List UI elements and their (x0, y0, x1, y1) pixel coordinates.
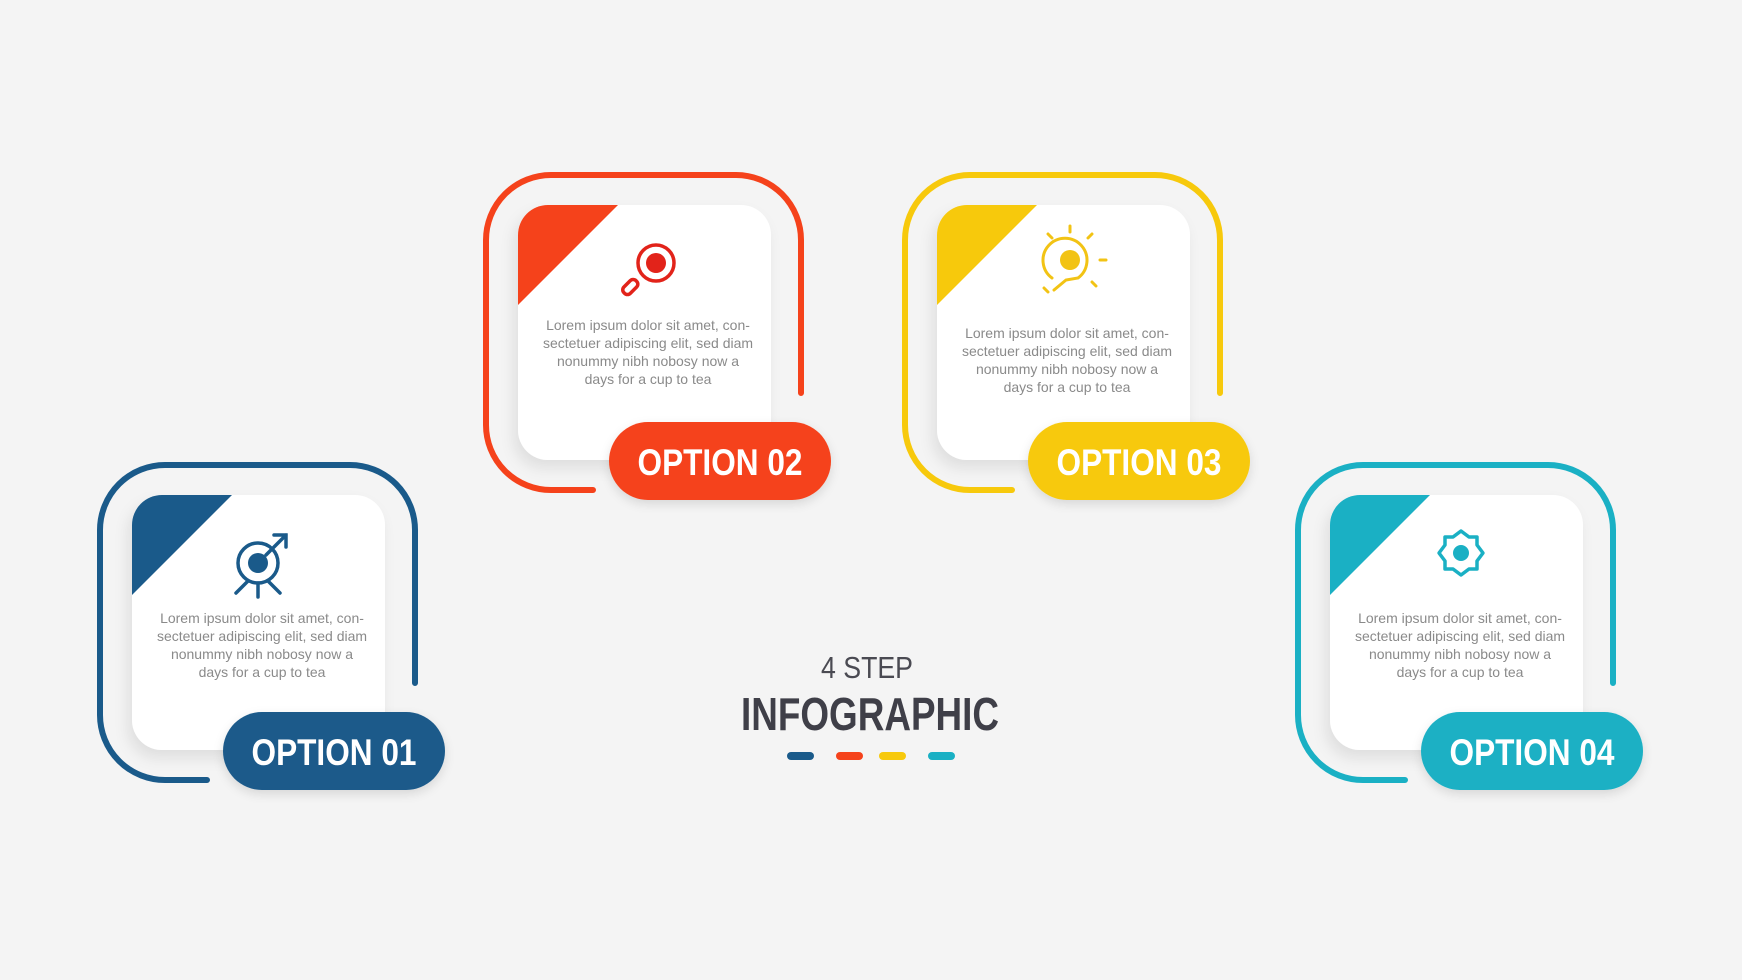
text block: days for a cup to tea (199, 664, 326, 680)
panel: option 03 (905, 175, 1250, 500)
text block: days for a cup to tea (1004, 379, 1131, 395)
inner card (937, 205, 1190, 460)
icon: gear (1439, 531, 1483, 575)
text block: sectetuer adipiscing elit, sed diam (157, 628, 367, 644)
panel: option 02 (486, 175, 831, 500)
title (741, 650, 999, 740)
text block: Lorem ipsum dolor sit amet, con- (1358, 610, 1562, 626)
option pill: OPTION 02 (638, 442, 802, 483)
inner card (1330, 495, 1583, 750)
corner triangle (518, 205, 618, 305)
text block: sectetuer adipiscing elit, sed diam (962, 343, 1172, 359)
text block: days for a cup to tea (1397, 664, 1524, 680)
option pill: OPTION 01 (252, 732, 416, 773)
icon: magnifier (621, 245, 674, 296)
frame outline (486, 175, 801, 490)
text block: sectetuer adipiscing elit, sed diam (543, 335, 753, 351)
option pill: OPTION 03 (1056, 442, 1222, 483)
corner triangle (1330, 495, 1430, 595)
frame outline (1298, 465, 1613, 780)
text block: Lorem ipsum dolor sit amet, con- (160, 610, 364, 626)
corner triangle (132, 495, 232, 595)
frame outline (100, 465, 415, 780)
title: INFOGRAPHIC (741, 688, 999, 740)
text block: nonummy nibh nobosy now a (1369, 646, 1551, 662)
option pill: OPTION 04 (1450, 732, 1615, 773)
frame outline (905, 175, 1220, 490)
text block: nonummy nibh nobosy now a (171, 646, 353, 662)
text block: sectetuer adipiscing elit, sed diam (1355, 628, 1565, 644)
panel: option 01 (100, 465, 445, 790)
panel: option 04 (1298, 465, 1643, 790)
text block: nonummy nibh nobosy now a (976, 361, 1158, 377)
corner triangle (937, 205, 1037, 305)
option pill (1028, 422, 1250, 500)
option pill (609, 422, 831, 500)
inner card (518, 205, 771, 460)
option pill (223, 712, 445, 790)
text block: Lorem ipsum dolor sit amet, con- (546, 317, 750, 333)
option pill (1421, 712, 1643, 790)
text block: nonummy nibh nobosy now a (557, 353, 739, 369)
text block: days for a cup to tea (585, 371, 712, 387)
icon: light bulb (1043, 226, 1106, 292)
inner card (132, 495, 385, 750)
legend dashes (787, 752, 955, 760)
icon: target arrow (236, 535, 286, 597)
title: 4 STEP (821, 650, 913, 685)
text block: Lorem ipsum dolor sit amet, con- (965, 325, 1169, 341)
